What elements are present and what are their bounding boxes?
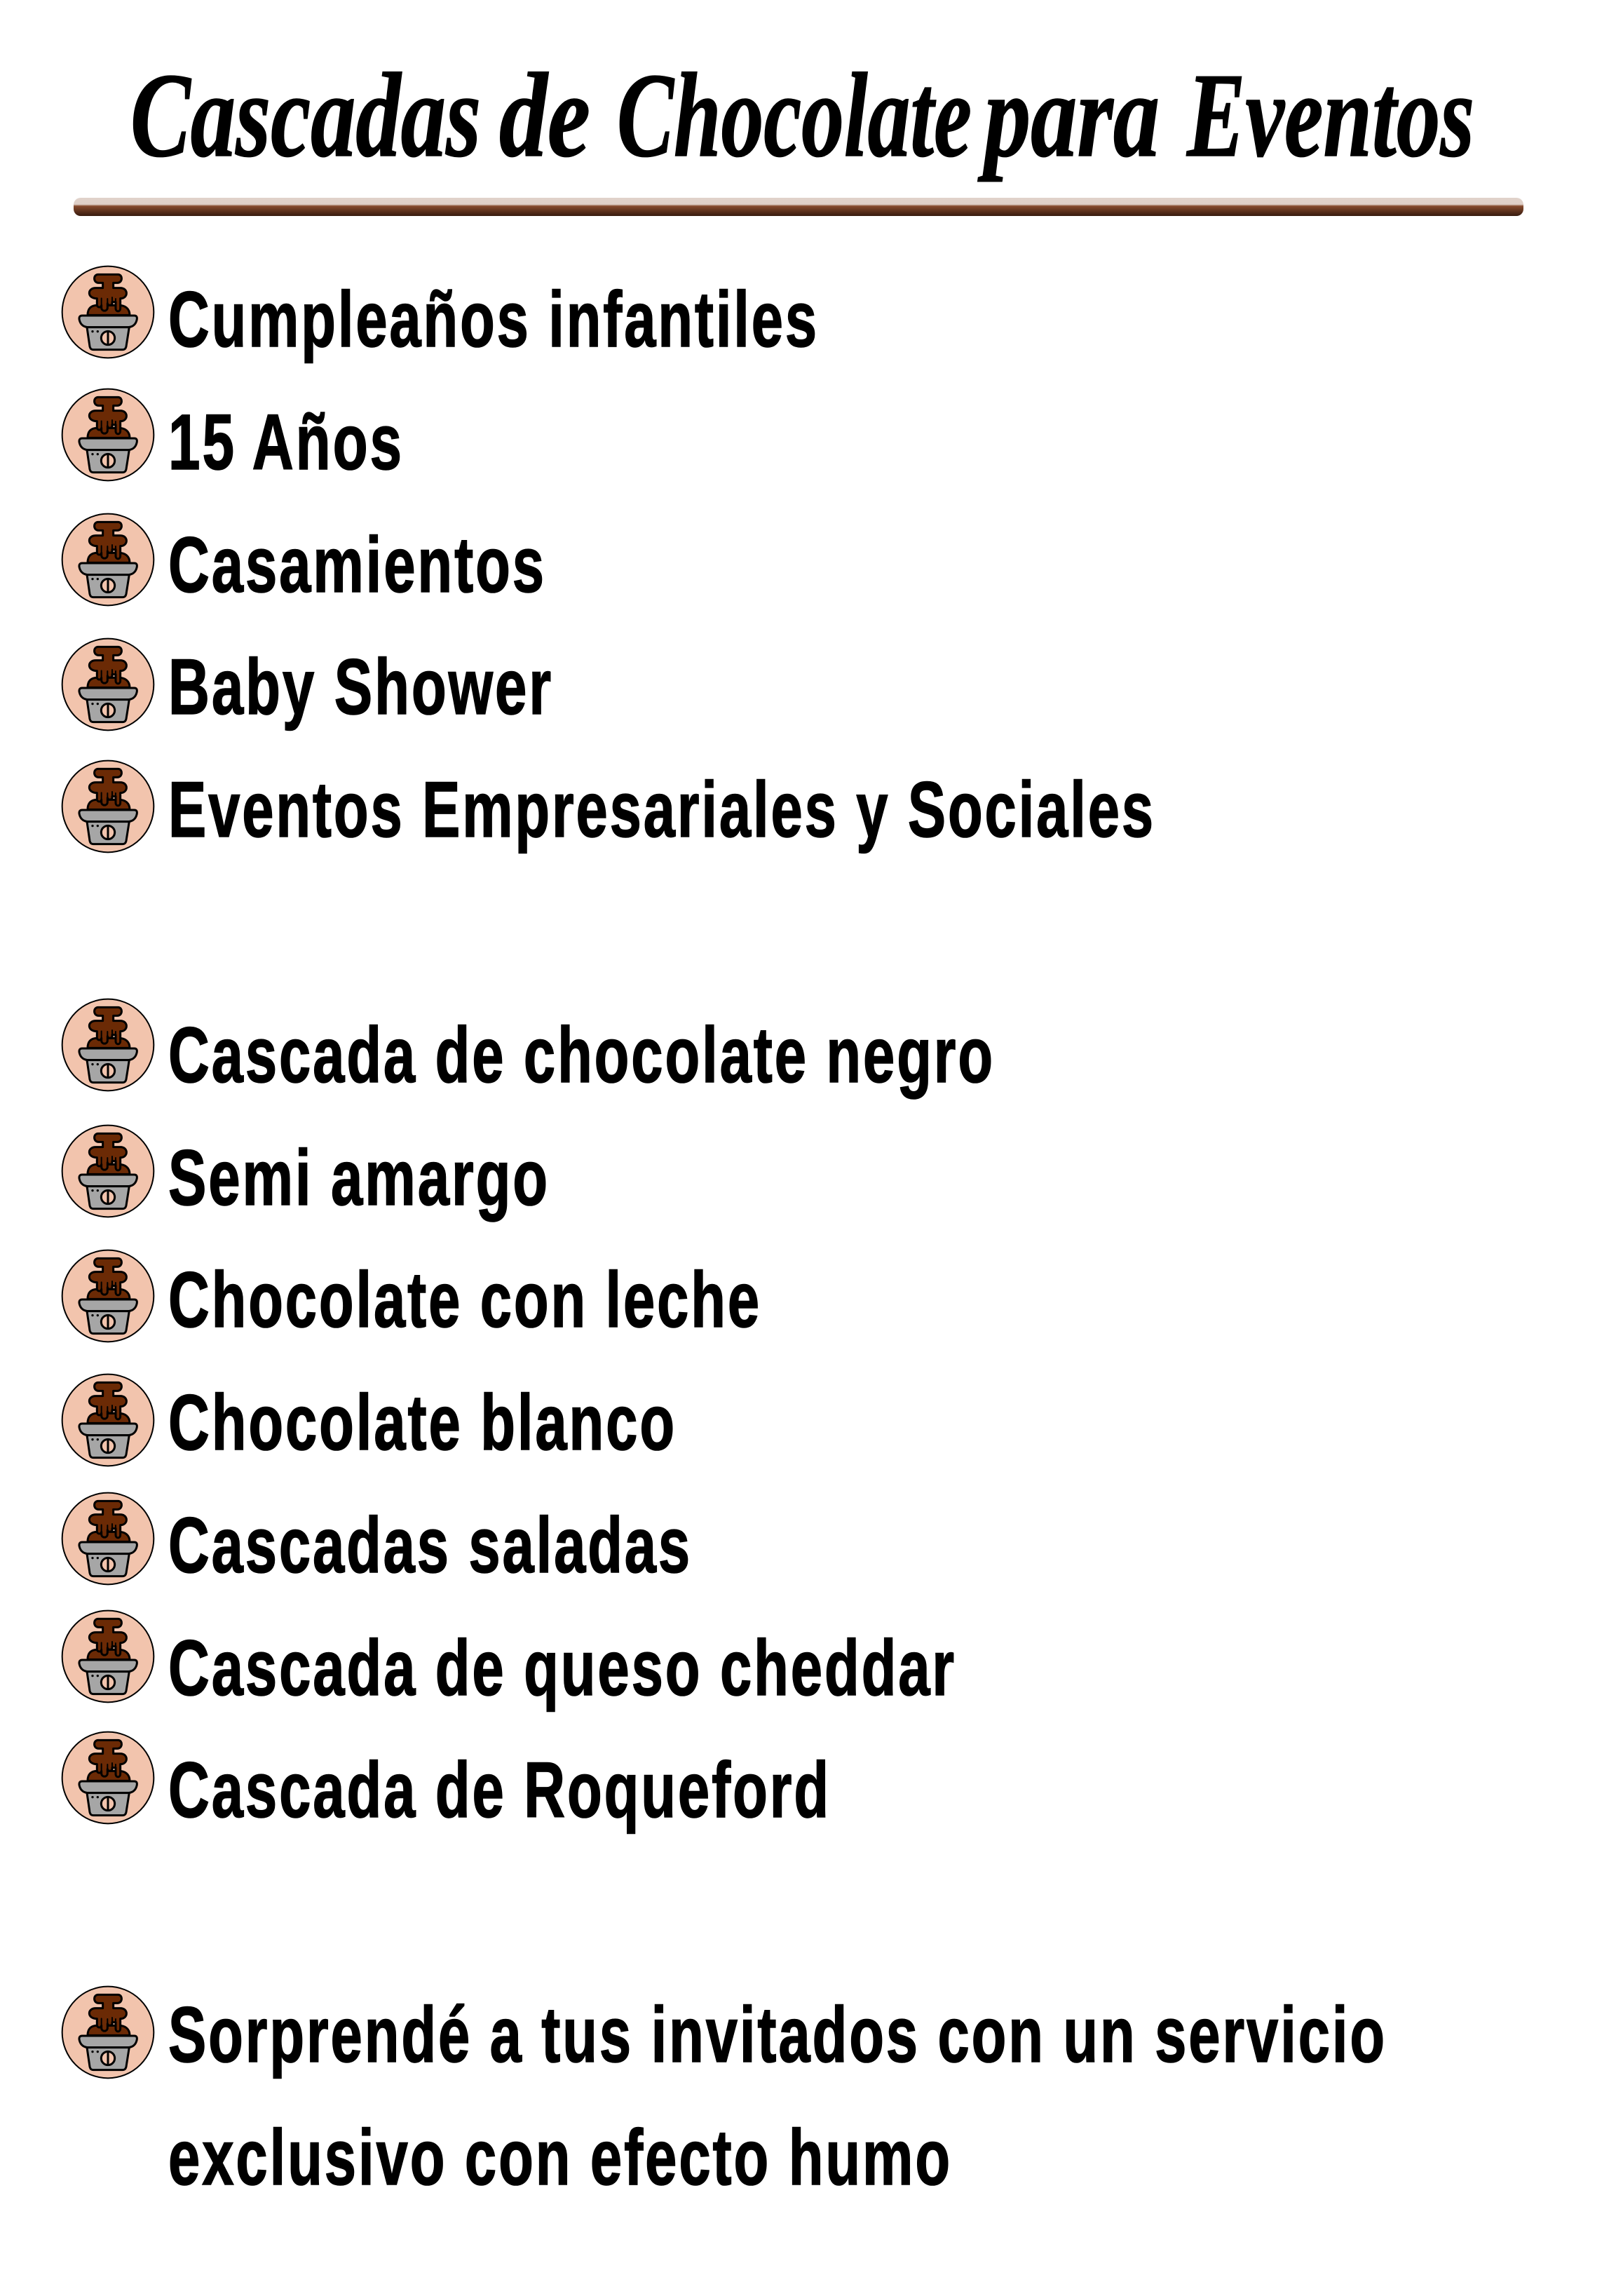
title: de [499, 49, 590, 182]
icon: chocolate fountain [62, 1987, 154, 2078]
list item: Cascada de chocolate negro [168, 1011, 995, 1099]
title: Chocolate [617, 49, 972, 182]
icon: chocolate fountain [62, 999, 154, 1090]
icon: chocolate fountain [62, 389, 154, 480]
title divider bar [74, 198, 1523, 216]
title: para [977, 49, 1160, 182]
list item: Casamientos [168, 521, 546, 609]
icon: chocolate fountain [62, 514, 154, 605]
panel: fountain flavours list [62, 999, 995, 1834]
icon: chocolate fountain [62, 1126, 154, 1217]
icon: chocolate fountain [62, 1611, 154, 1702]
icon: chocolate fountain [62, 1250, 154, 1342]
icon: chocolate fountain [62, 761, 154, 852]
list item: Cascadas saladas [168, 1501, 692, 1589]
list item: Semi amargo [168, 1134, 550, 1222]
title: Eventos [1186, 49, 1474, 182]
panel: smoke effect callout [62, 1987, 1387, 2201]
list item: Eventos Empresariales y Sociales [168, 766, 1155, 853]
list item: Baby Shower [168, 643, 553, 731]
callout text [168, 1991, 1387, 2201]
icon: chocolate fountain [62, 1493, 154, 1584]
callout text: exclusivo con efecto humo [168, 2114, 952, 2201]
list item: Cascada de queso cheddar [168, 1624, 956, 1712]
list item: Chocolate con leche [168, 1256, 761, 1344]
icon: chocolate fountain [62, 1732, 154, 1823]
panel: event types list [62, 266, 1155, 853]
list item: Chocolate blanco [168, 1379, 677, 1466]
title: Cascadas [130, 49, 481, 182]
icon: chocolate fountain [62, 266, 154, 358]
icon: chocolate fountain [62, 639, 154, 730]
list item: Cascada de Roqueford [168, 1746, 831, 1834]
list item: Cumpleaños infantiles [168, 276, 819, 363]
title [130, 49, 1474, 182]
icon: chocolate fountain [62, 1375, 154, 1466]
list item: 15 Años [168, 398, 404, 486]
